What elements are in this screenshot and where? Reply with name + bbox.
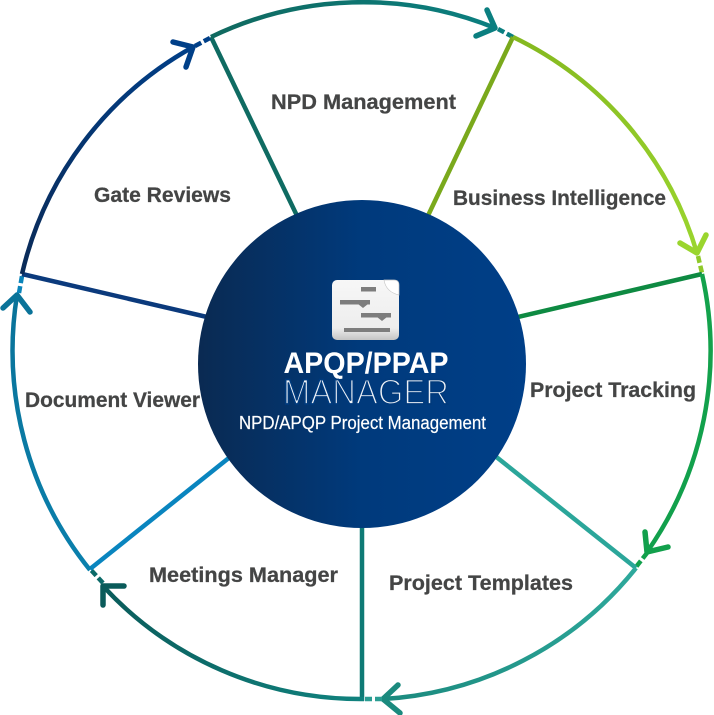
label: Project Tracking: Project Tracking [530,379,696,402]
segment: Project Templates arc and divider [365,440,636,713]
label: Gate Reviews: Gate Reviews [94,184,231,207]
label: Business Intelligence: Business Intelligence [453,187,666,210]
tagline: NPD/APQP Project Management [239,413,486,433]
icon: gantt chart document [332,280,399,340]
label: Project Templates: Project Templates [389,572,573,595]
label: Meetings Manager: Meetings Manager [149,564,338,587]
segment: Document Viewer arc and divider [3,276,250,570]
segment: Project Tracking arc and divider [505,274,711,567]
label: Document Viewer: Document Viewer [25,389,200,412]
segment: Gate Reviews arc and divider [22,38,220,320]
title: APQP/PPAP: APQP/PPAP [284,347,448,380]
segment: Business Intelligence arc and divider [424,37,706,273]
center disc [198,200,526,528]
segment: NPD Management arc and divider [211,2,513,222]
label: NPD Management: NPD Management [271,91,456,114]
segment: Meetings Manager arc and divider [91,510,364,701]
subtitle: MANAGER: MANAGER [283,373,449,412]
